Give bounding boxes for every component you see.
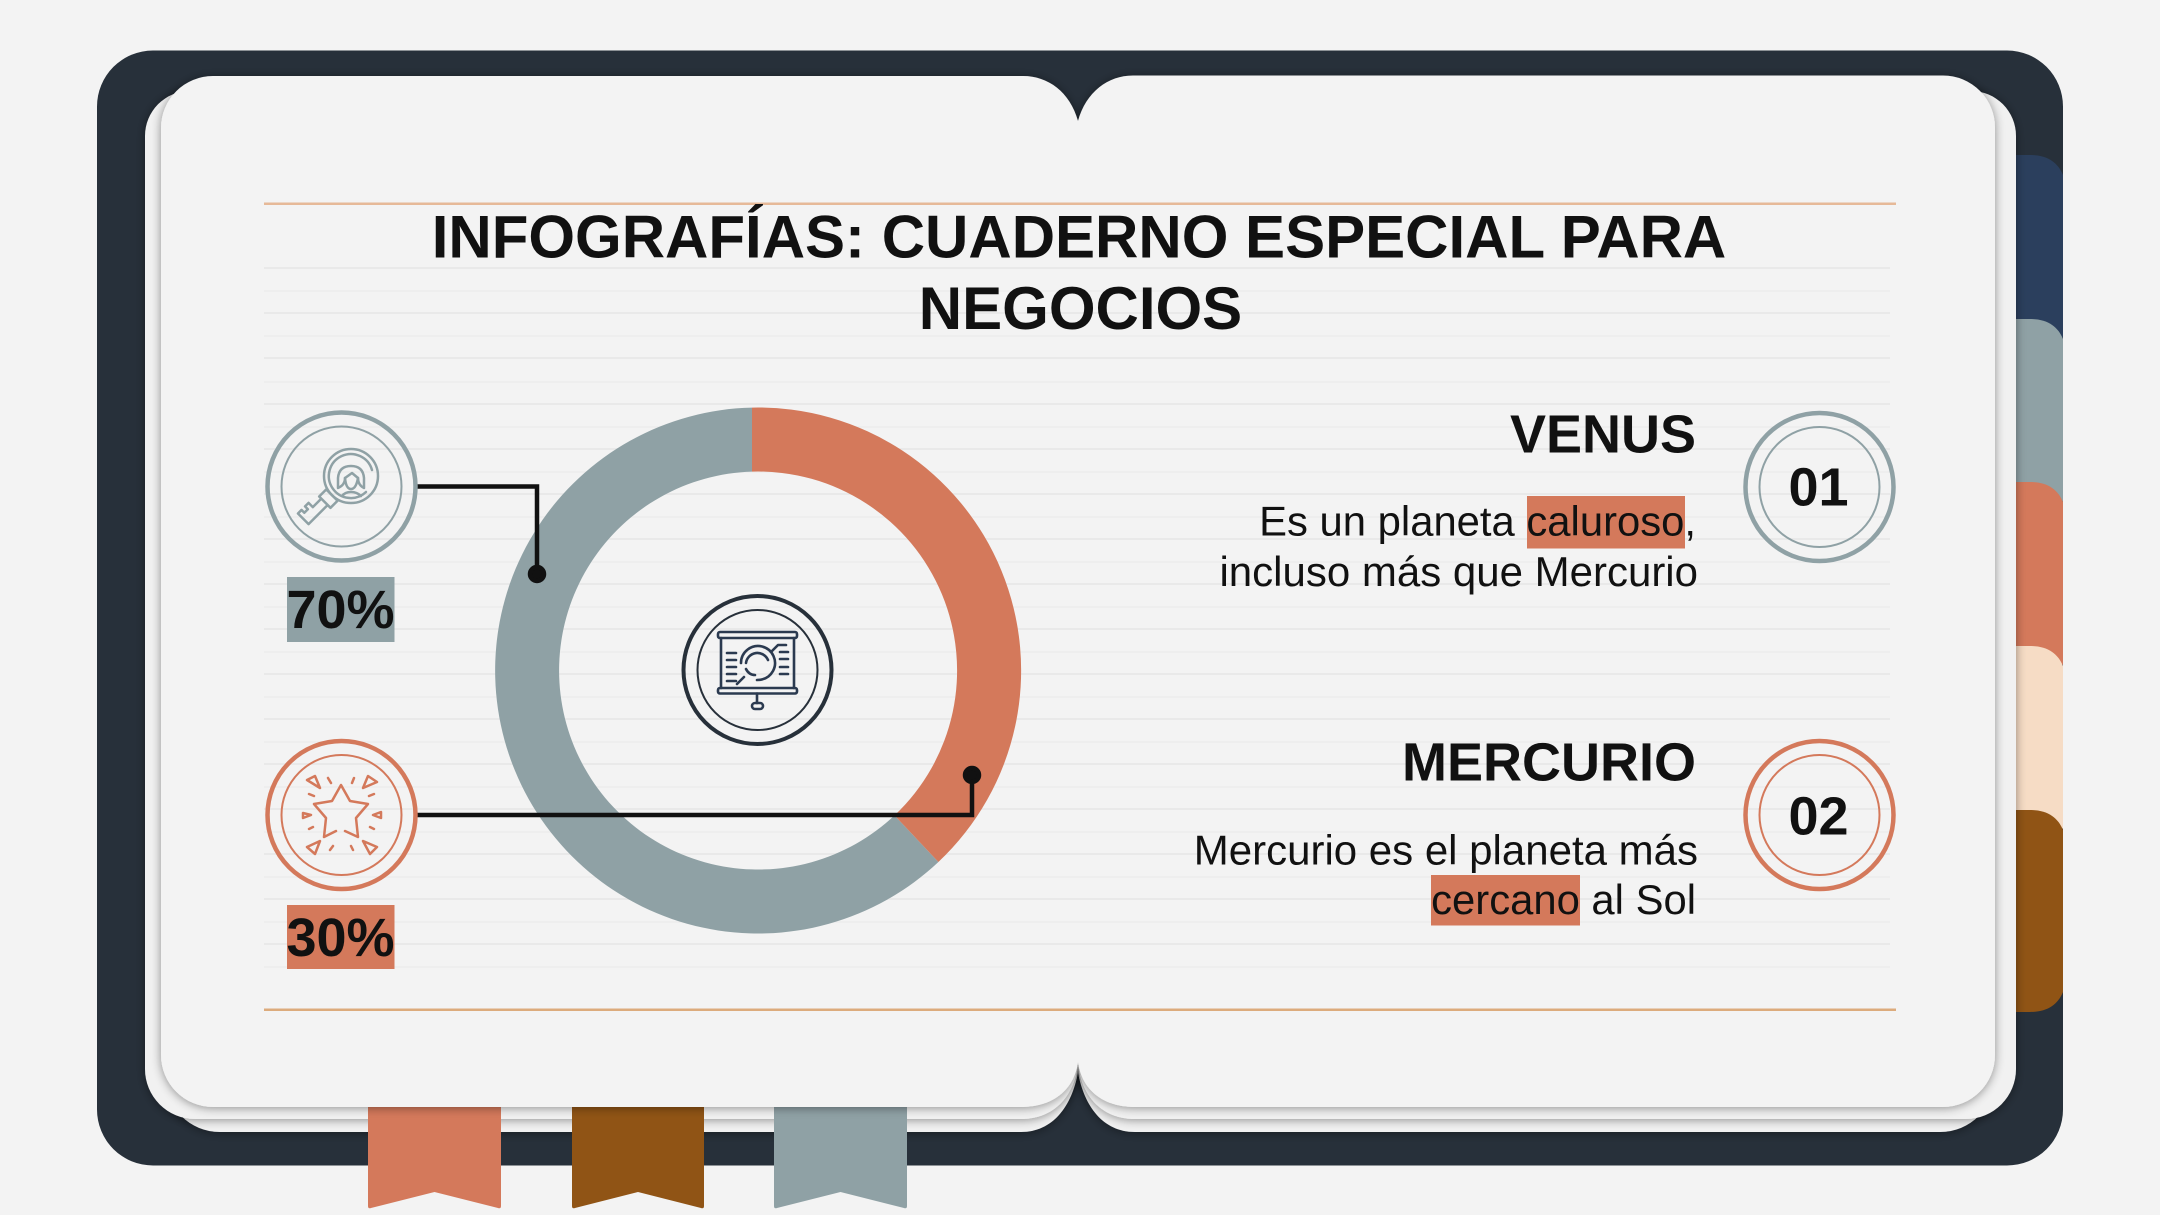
middle paper sheet [145,91,2016,1119]
text: Mercurio description: cercano al Sol [1431,876,1696,923]
icon: star [268,741,416,889]
top notebook page [161,76,1995,1107]
page tabs [1950,155,2063,1012]
ribbon: brown [572,1100,704,1208]
lowest paper sheet [165,100,1995,1132]
highlight: cercano [1431,875,1580,926]
tab: coral [1950,482,2063,684]
title: INFOGRAFÍAS: CUADERNO ESPECIAL PARA [432,204,1726,270]
heading: Mercurio: MERCURIO [1402,732,1696,792]
number badge: 01: 01 [1788,458,1849,518]
block: Venus [1219,404,1698,595]
tab: navy [1950,155,2063,357]
tab: sage [1950,319,2063,521]
donut segment: coral 30% [752,407,1021,862]
donut segment: sage 70% [495,408,938,933]
text: Mercurio description: Mercurio es el planeta más [1194,826,1698,874]
number badge: 02: 02 [1788,787,1849,847]
heading: Venus: VENUS [1510,404,1696,464]
icon: presentation board [684,596,832,744]
text: Mercurio description [1194,826,1698,923]
connector: sage icon to donut [416,486,544,581]
bookmark ribbons [368,1100,907,1208]
icon: key with person [268,412,416,560]
text: Venus description: Es un planeta caluroso, [1259,498,1696,544]
donut chart [495,407,1021,933]
tab: brown [1950,810,2063,1012]
number badge: 02 [1746,741,1894,889]
connector: coral icon to donut [416,768,979,815]
label: 30%: 30% [286,908,395,968]
tab: peach [1950,646,2063,848]
title: NEGOCIOS [919,275,1242,342]
top rule [264,202,1896,205]
text: Venus description: incluso más que Mercurio [1219,548,1698,595]
title [432,204,1726,342]
bottom rule [264,1008,1896,1011]
highlight: caluroso [1527,496,1685,548]
block: Mercurio [1194,732,1698,926]
number badge: 01 [1746,413,1894,561]
text: Venus description [1219,498,1698,595]
ribbon: sage [774,1100,907,1208]
ribbon: coral [368,1100,501,1208]
label: 70%: 70% [286,580,395,640]
